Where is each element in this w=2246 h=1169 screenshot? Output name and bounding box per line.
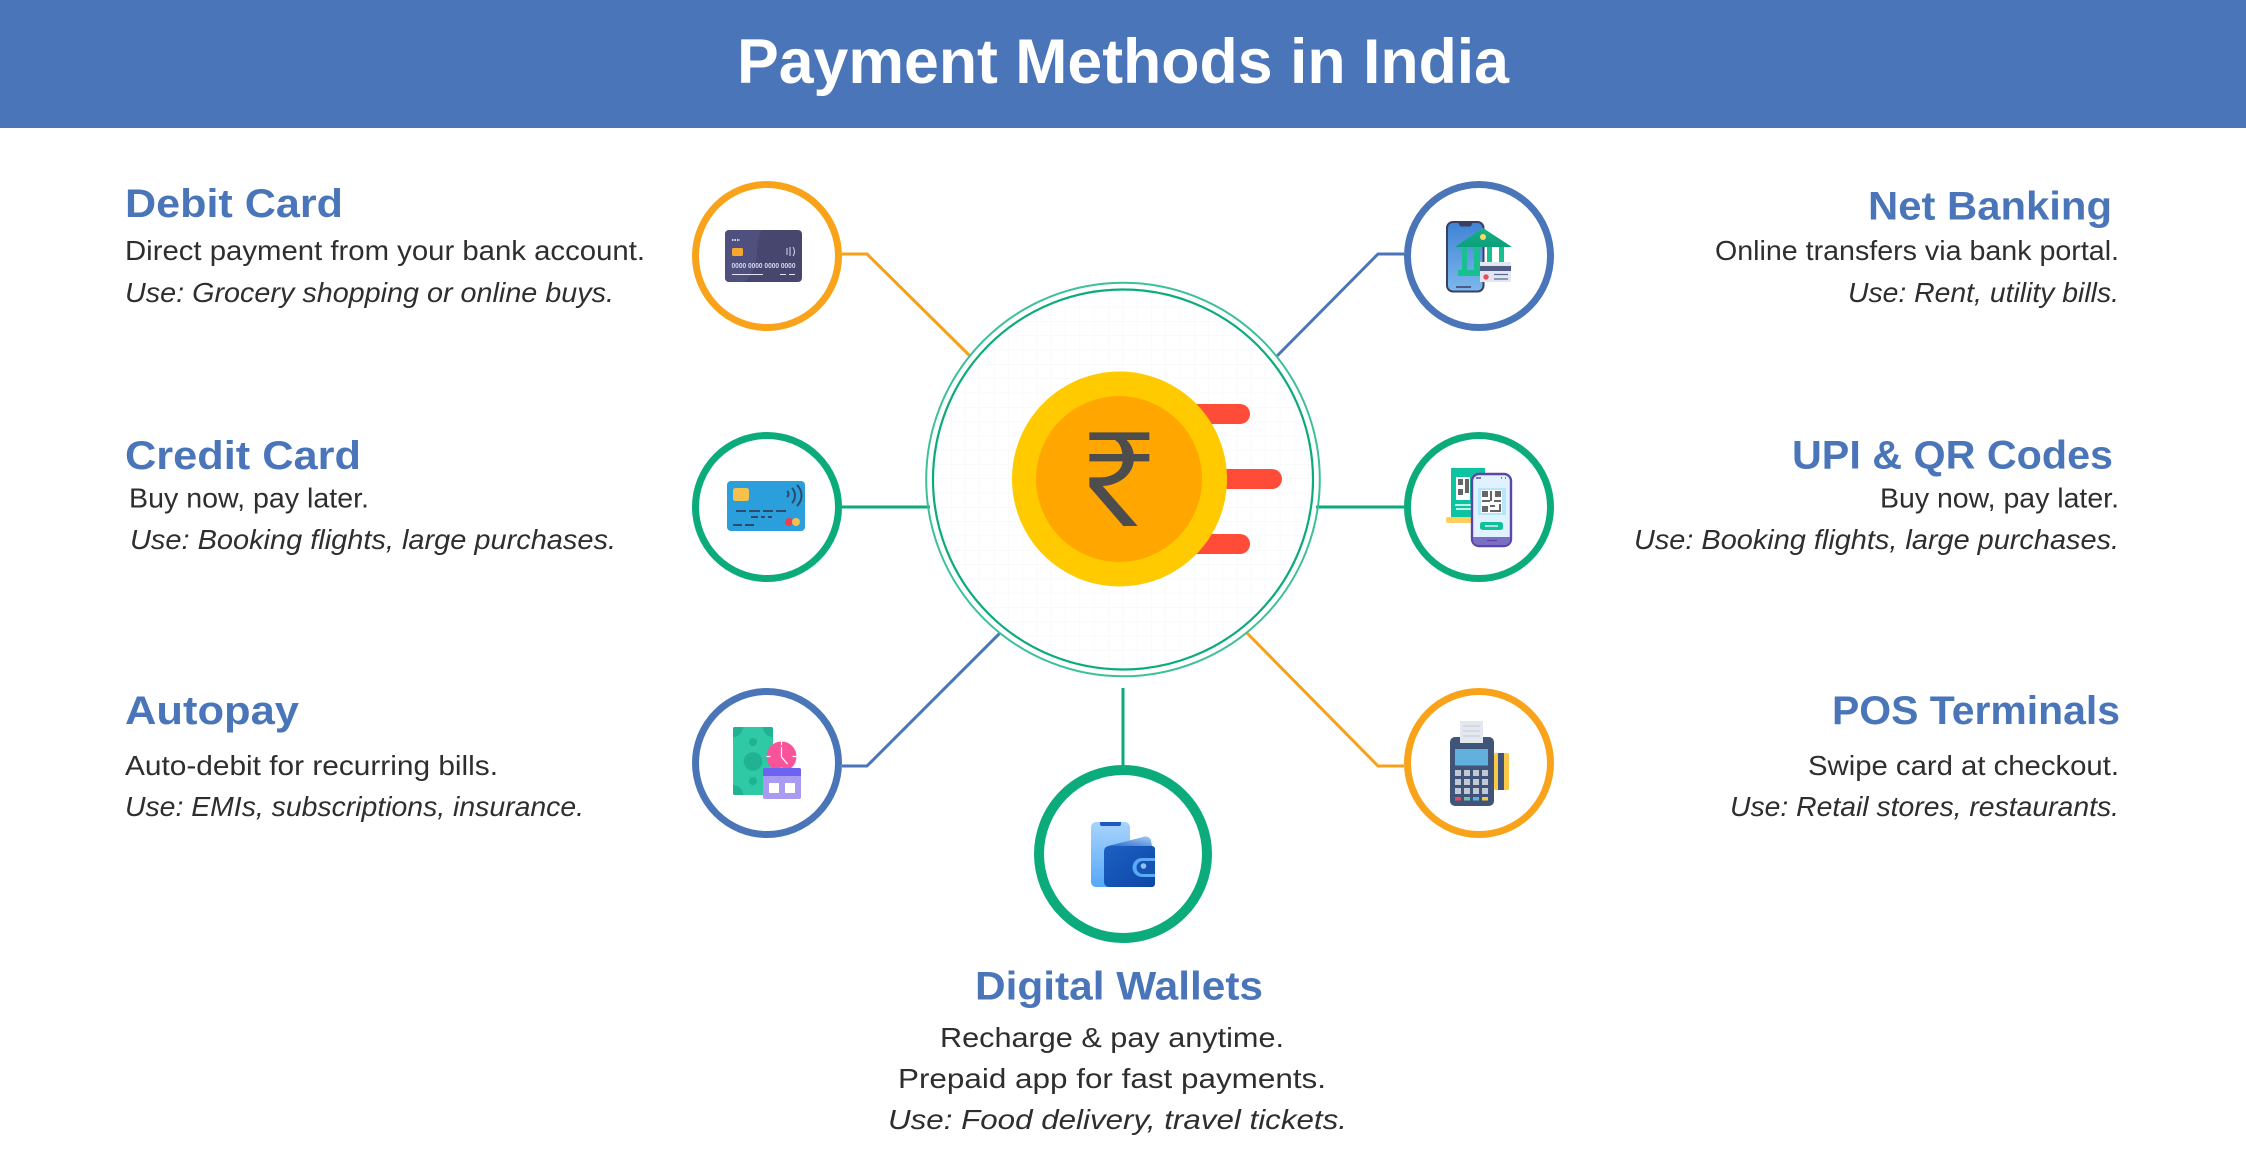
usage: credit card: Use: Booking flights, large purchases. — [130, 524, 616, 555]
node: POS terminals — [1408, 692, 1550, 834]
description: debit card: Direct payment from your bank account. — [125, 235, 645, 266]
heading: net banking: Net Banking — [1868, 184, 2112, 228]
text: UPI and QR codes — [1634, 434, 2119, 555]
description: net banking: Online transfers via bank portal. — [1715, 235, 2119, 266]
icon: blue credit card — [727, 481, 805, 531]
usage: debit card: Use: Grocery shopping or online buys. — [125, 277, 614, 308]
text: debit card — [125, 182, 645, 308]
usage: net banking: Use: Rent, utility bills. — [1848, 277, 2119, 308]
usage: POS terminals: Use: Retail stores, restaurants. — [1730, 791, 2119, 822]
usage: autopay: Use: EMIs, subscriptions, insurance. — [125, 791, 584, 822]
heading: digital wallets: Digital Wallets — [975, 964, 1263, 1008]
node: autopay — [696, 692, 838, 834]
description: credit card: Buy now, pay later. — [129, 482, 369, 514]
heading: credit card: Credit Card — [125, 434, 361, 478]
description: UPI and QR codes: Buy now, pay later. — [1880, 482, 2119, 514]
text: POS terminals — [1730, 689, 2120, 822]
central hub — [926, 283, 1320, 676]
icon: rupee coin — [1012, 372, 1227, 586]
icon: QR stand and phone — [1446, 468, 1511, 546]
icon: dark bank card: 0000 0000 0000 0000 — [732, 261, 796, 270]
text: net banking — [1715, 184, 2119, 308]
text: autopay — [125, 689, 584, 822]
icon: phone and wallet — [1091, 822, 1155, 887]
node: net banking — [1408, 184, 1550, 328]
description line one: digital wallets: Recharge & pay anytime. — [940, 1022, 1284, 1053]
text: credit card — [125, 434, 616, 555]
text: digital wallets — [888, 964, 1347, 1135]
description: autopay: Auto-debit for recurring bills. — [125, 750, 498, 781]
heading: UPI and QR codes: UPI & QR Codes — [1792, 434, 2113, 478]
node: digital wallets — [1039, 770, 1207, 938]
heading: POS terminals: POS Terminals — [1832, 689, 2120, 733]
usage: digital wallets: Use: Food delivery, travel tickets. — [888, 1104, 1347, 1135]
icon: card machine — [1450, 721, 1509, 806]
heading: debit card: Debit Card — [125, 182, 343, 226]
icon: dark bank card — [725, 230, 802, 282]
heading: autopay: Autopay — [125, 689, 300, 733]
usage: UPI and QR codes: Use: Booking flights, large purchases. — [1634, 524, 2119, 555]
node: UPI and QR codes — [1408, 436, 1550, 578]
node: debit card — [696, 184, 838, 328]
connector lines — [842, 254, 1404, 766]
title: Payment Methods in India — [737, 27, 1510, 97]
header banner — [0, 0, 2246, 128]
icon: banknote, clock and calendar — [733, 727, 801, 799]
icon: phone with bank — [1447, 222, 1512, 292]
description line two: digital wallets: Prepaid app for fast payments. — [898, 1063, 1326, 1094]
icon: speed bars — [1170, 404, 1282, 554]
node: credit card — [696, 436, 838, 578]
description: POS terminals: Swipe card at checkout. — [1808, 750, 2119, 781]
